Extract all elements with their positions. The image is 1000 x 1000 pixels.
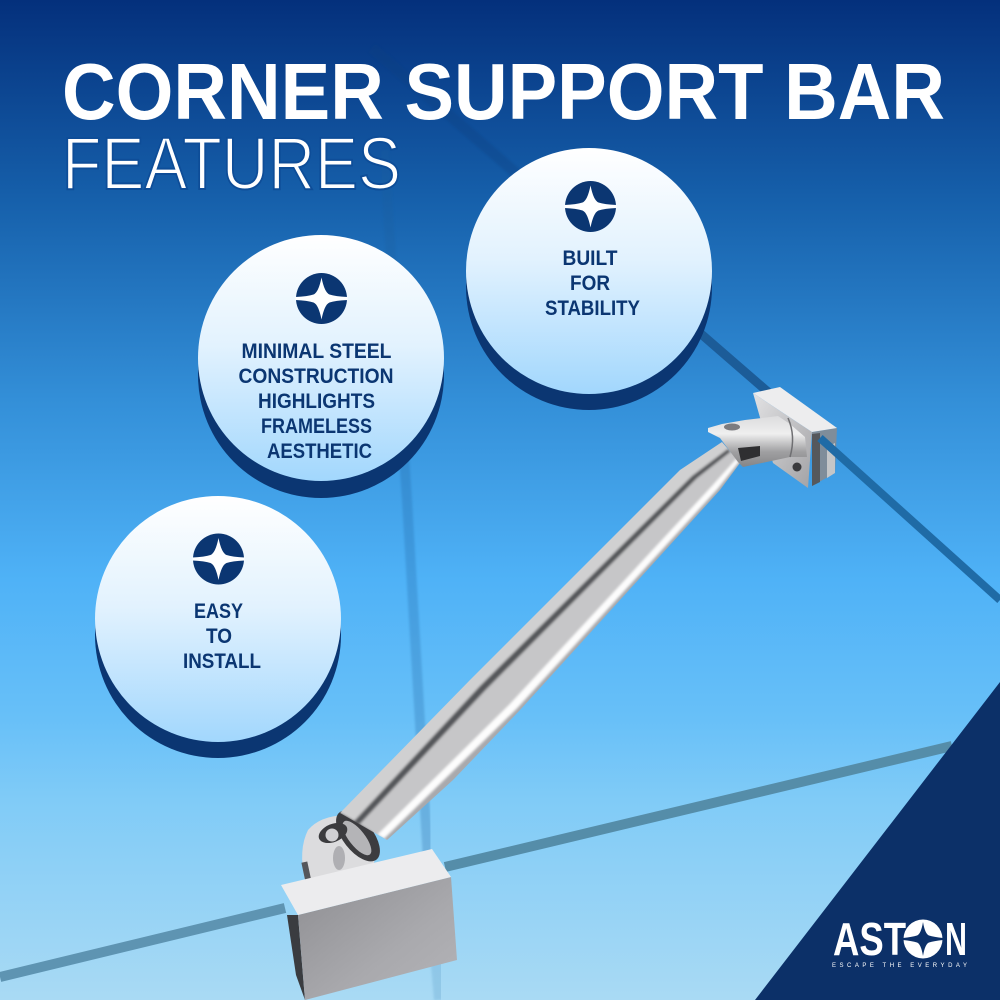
panel: minimal steel construction [198,235,444,498]
lower clamp [281,849,457,1000]
tube [340,442,740,840]
text: BUILT [562,247,618,270]
upper swivel [708,416,807,467]
logo: aston [832,913,967,969]
icon: logo star [903,920,943,958]
text [238,340,394,463]
logo: aston: N [945,913,967,965]
text: HIGHLIGHTS [258,390,375,413]
text: FRAMELESS [261,415,372,438]
icon: star badge [564,181,616,232]
text: INSTALL [183,650,261,673]
title [62,47,945,205]
text: TO [206,625,232,648]
corner triangle [755,682,1000,1000]
text: AESTHETIC [267,440,372,463]
panel: built for stability [466,148,712,410]
lower swivel [301,803,388,885]
text: CONSTRUCTION [238,365,394,388]
text: MINIMAL STEEL [242,340,392,363]
heading: features: FEATURES [62,122,401,205]
text [545,247,640,320]
upper clamp [753,387,1000,600]
text: FOR [570,272,610,295]
logo: aston: ESCAPE THE EVERYDAY [832,963,967,969]
panel: easy to install [95,496,341,758]
icon: star badge [296,273,348,324]
glass edge through clamp [820,438,1000,600]
text: STABILITY [545,297,640,320]
logo: aston: AST [833,913,906,965]
support bar [281,387,1000,1000]
heading: corner support bar: CORNER SUPPORT BAR [62,47,945,136]
icon: star badge [192,534,244,584]
text: EASY [194,600,243,623]
text [183,600,261,673]
